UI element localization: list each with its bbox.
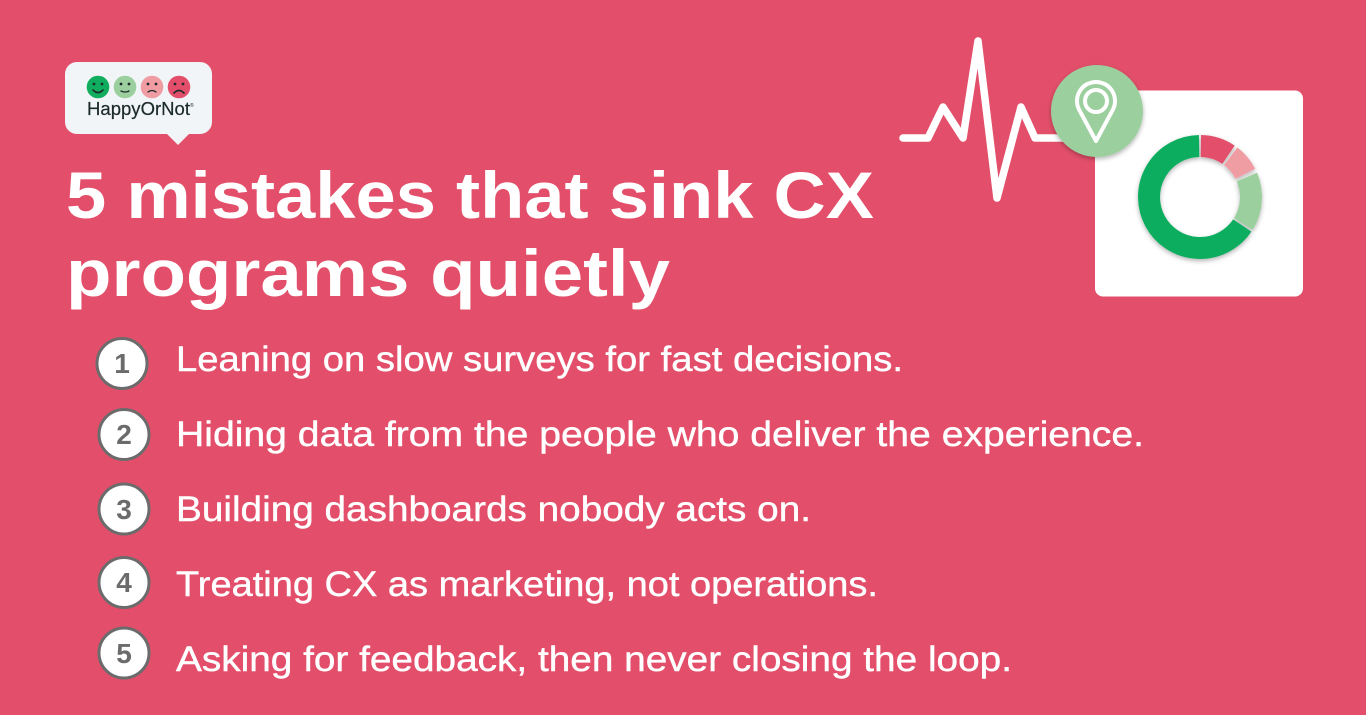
- list item 5: 5: [116, 638, 132, 669]
- title: [66, 158, 874, 310]
- logo: HappyOrNot speech bubble: [65, 62, 212, 145]
- segment: red: [1201, 146, 1228, 155]
- icon: location pin badge: [1051, 65, 1143, 157]
- list item 1: Leaning on slow surveys for fast decisions.: [176, 340, 903, 379]
- icon: heartbeat line: [903, 41, 1068, 198]
- logo: HappyOrNot speech bubble: ®: [190, 102, 194, 109]
- numbered list: [97, 338, 1144, 679]
- logo: HappyOrNot speech bubble: HappyOrNot: [87, 99, 190, 119]
- list item 4: Treating CX as marketing, not operations.: [176, 565, 878, 604]
- title: 5 mistakes that sink CX: [66, 158, 874, 232]
- list item 2: 2: [116, 419, 132, 450]
- segment: dark green: [1149, 146, 1242, 248]
- list item 2: [99, 410, 1144, 460]
- list item 3: Building dashboards nobody acts on.: [176, 490, 811, 529]
- segment: light green: [1243, 177, 1251, 224]
- segment: light pink: [1231, 156, 1245, 174]
- list item 5: [99, 628, 1012, 679]
- list item 5: Asking for feedback, then never closing the loop.: [176, 640, 1012, 679]
- title: programs quietly: [66, 236, 670, 310]
- panel: white dashboard card: [1095, 90, 1303, 296]
- list item 3: [99, 484, 811, 534]
- list item 2: Hiding data from the people who deliver the experience.: [176, 415, 1144, 454]
- list item 1: [97, 338, 903, 388]
- list item 4: 4: [116, 567, 132, 598]
- list item 3: 3: [116, 494, 132, 525]
- donut chart: [1149, 146, 1251, 248]
- list item 1: 1: [114, 348, 130, 379]
- list item 4: [99, 558, 878, 608]
